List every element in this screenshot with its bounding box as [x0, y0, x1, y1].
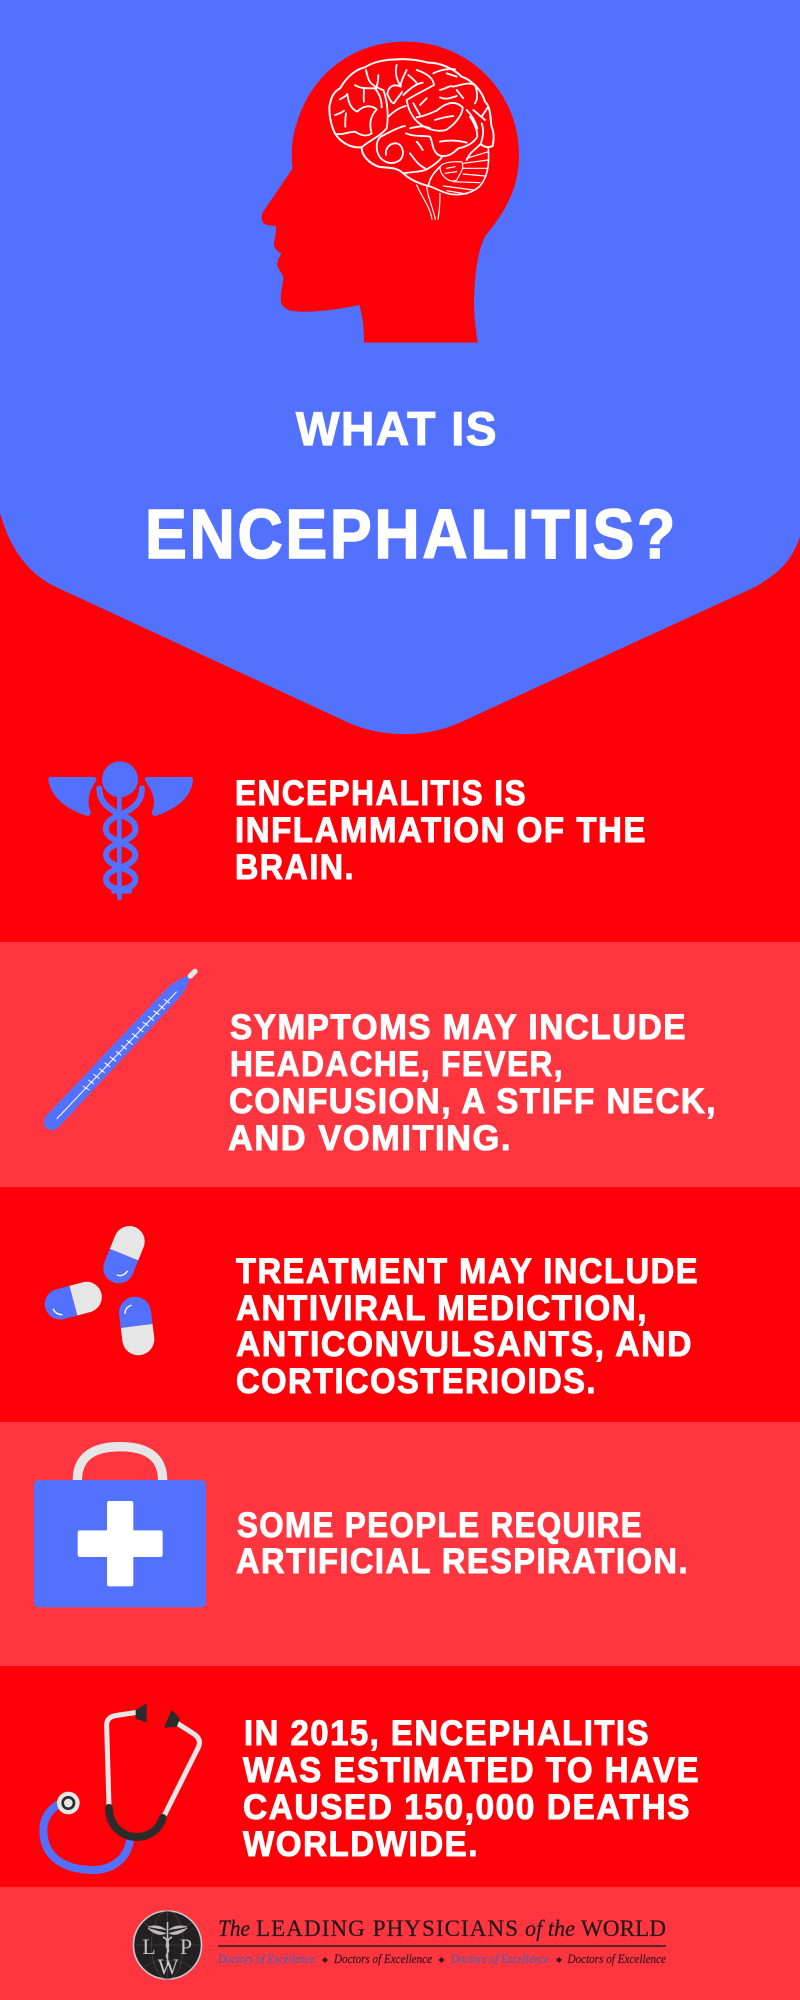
footer: organisation name: The [218, 1916, 250, 1941]
panel: deaths band [0, 1666, 800, 1887]
brain line art [329, 59, 494, 219]
icon: LPW logo: L [142, 1934, 156, 1959]
icon: thermometer [44, 971, 195, 1130]
panel: footer band [0, 1887, 800, 2000]
text: definition: INFLAMMATION OF THE [235, 811, 647, 850]
icon: LPW logo [134, 1911, 202, 1979]
text: respiration: ARTIFICIAL RESPIRATION. [236, 1542, 689, 1581]
icon: LPW logo: P [180, 1934, 192, 1959]
text: treatment: ANTICONVULSANTS, AND [236, 1325, 693, 1364]
cerebellum [428, 148, 489, 195]
text: respiration: SOME PEOPLE REQUIRE [237, 1506, 643, 1545]
text: deaths: WORLDWIDE. [243, 1825, 479, 1864]
text: symptoms: SYMPTOMS MAY INCLUDE [230, 1008, 687, 1047]
footer: tagline: Doctors of Excellence [333, 1952, 432, 1966]
text: definition: BRAIN. [235, 848, 355, 887]
footer: rule [218, 1945, 666, 1947]
text: deaths: IN 2015, ENCEPHALITIS [244, 1714, 650, 1753]
text: definition: ENCEPHALITIS IS [235, 774, 527, 813]
footer: tagline [217, 1952, 666, 1966]
brainstem [417, 185, 440, 219]
panel: respiration band [0, 1422, 800, 1666]
icon: LPW logo: W [158, 1954, 179, 1979]
icon: stethoscope [43, 1703, 199, 1870]
text: treatment: TREATMENT MAY INCLUDE [236, 1252, 699, 1291]
head silhouette [262, 42, 519, 343]
text: respiration [236, 1506, 689, 1581]
text: symptoms: HEADACHE, FEVER, [230, 1045, 564, 1084]
footer: organisation name: LEADING PHYSICIANS [256, 1916, 518, 1941]
footer: tagline: Doctors of Excellence [567, 1952, 666, 1966]
icon: pills [41, 1221, 156, 1357]
text: deaths: CAUSED 150,000 DEATHS [243, 1788, 691, 1827]
text: treatment [236, 1252, 699, 1401]
footer: organisation name: of the [525, 1916, 575, 1941]
text: symptoms: CONFUSION, A STIFF NECK, [229, 1082, 717, 1121]
text: deaths: WAS ESTIMATED TO HAVE [243, 1751, 700, 1790]
icon: head silhouette with brain [262, 42, 519, 343]
panel: symptoms band [0, 942, 800, 1187]
text: deaths [243, 1714, 700, 1864]
text: symptoms [228, 1008, 717, 1158]
icon: medical kit [34, 1447, 206, 1607]
heading: what is: WHAT IS [296, 402, 498, 455]
text: treatment: CORTICOSTERIOIDS. [236, 1362, 597, 1401]
text: symptoms: AND VOMITING. [228, 1119, 512, 1158]
icon: caduceus [48, 761, 193, 898]
footer: organisation name [218, 1916, 666, 1941]
footer: tagline: Doctors of Excellence [450, 1952, 549, 1966]
text: definition [235, 774, 647, 887]
heading: encephalitis: ENCEPHALITIS? [145, 495, 678, 573]
footer: tagline: Doctors of Excellence [217, 1952, 315, 1966]
footer: organisation name: WORLD [581, 1916, 666, 1941]
panel: treatment band [0, 1187, 800, 1422]
text: treatment: ANTIVIRAL MEDICTION, [236, 1289, 648, 1328]
panel: header background [0, 0, 800, 734]
